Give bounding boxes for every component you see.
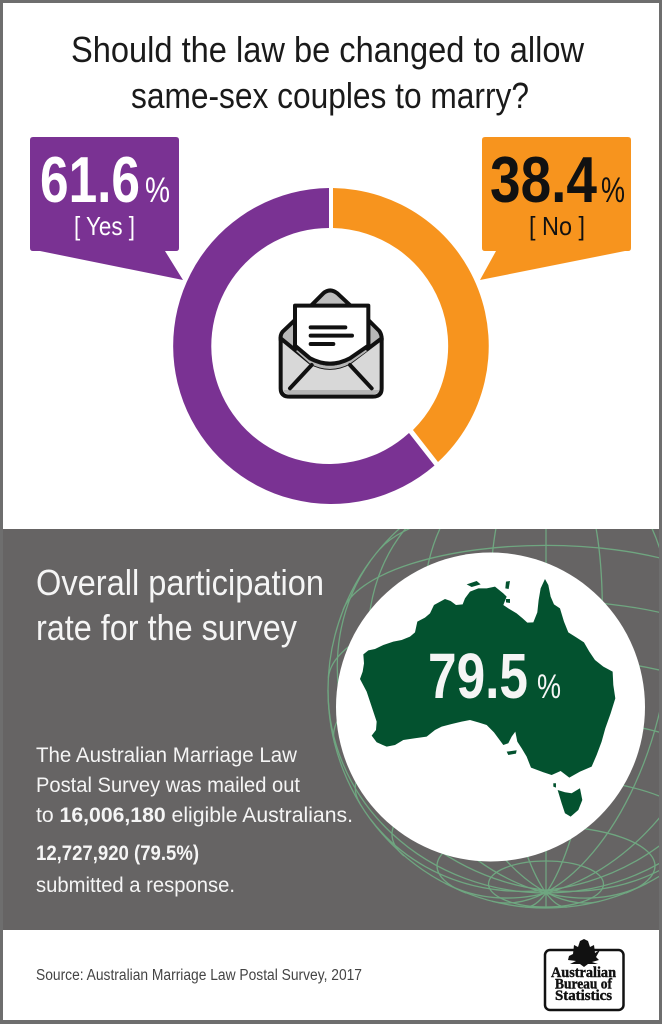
panel: participation [3,529,659,930]
callout: yes [30,137,183,280]
icon: envelope with letter [281,290,382,397]
body text: responses: submitted a response. [36,874,235,897]
callout: no [480,137,631,280]
title [71,29,585,116]
globe wireframe [327,529,659,909]
statistic: 79.5%: % [537,668,561,706]
title: same-sex couples to marry? [131,75,529,116]
icon: coat of arms [568,939,600,967]
callout: yes: [ Yes ] [74,211,135,241]
heading: participation rate [36,562,324,648]
no segment 38.4% [333,188,489,462]
body text: survey mail out: The Australian Marriage Law [36,744,298,767]
title: Should the law be changed to allow [71,29,585,70]
callout: no: [ No ] [529,211,585,241]
callout: no: 38.4 [490,143,597,216]
map of Australia [360,579,615,817]
heading: participation rate: Overall participation [36,562,324,603]
logo: Australian Bureau of Statistics: Statistics [555,988,612,1004]
source note: Source: Australian Marriage Law Postal Survey, 2017 [36,967,362,984]
yes segment 61.6% [173,188,434,504]
logo: Australian Bureau of Statistics: Bureau of [555,976,613,992]
callout: yes: % [145,171,170,210]
logo: Australian Bureau of Statistics: Australian [551,965,617,981]
logo: Australian Bureau of Statistics [545,939,624,1010]
body text: responses: 12,727,920 (79.5%) [36,842,199,865]
white disc [336,552,645,862]
heading: participation rate: rate for the survey [36,607,297,648]
callout: yes: 61.6 [40,143,140,216]
donut chart [173,188,489,504]
body text: survey mail out [36,744,353,827]
callout: no: % [601,171,625,210]
body text: survey mail out: Postal Survey was mailed out [36,774,300,797]
body text: survey mail out: to 16,006,180 eligible Australians. [36,804,353,827]
body text: responses [36,842,235,897]
statistic: 79.5%: 79.5 [428,640,528,712]
